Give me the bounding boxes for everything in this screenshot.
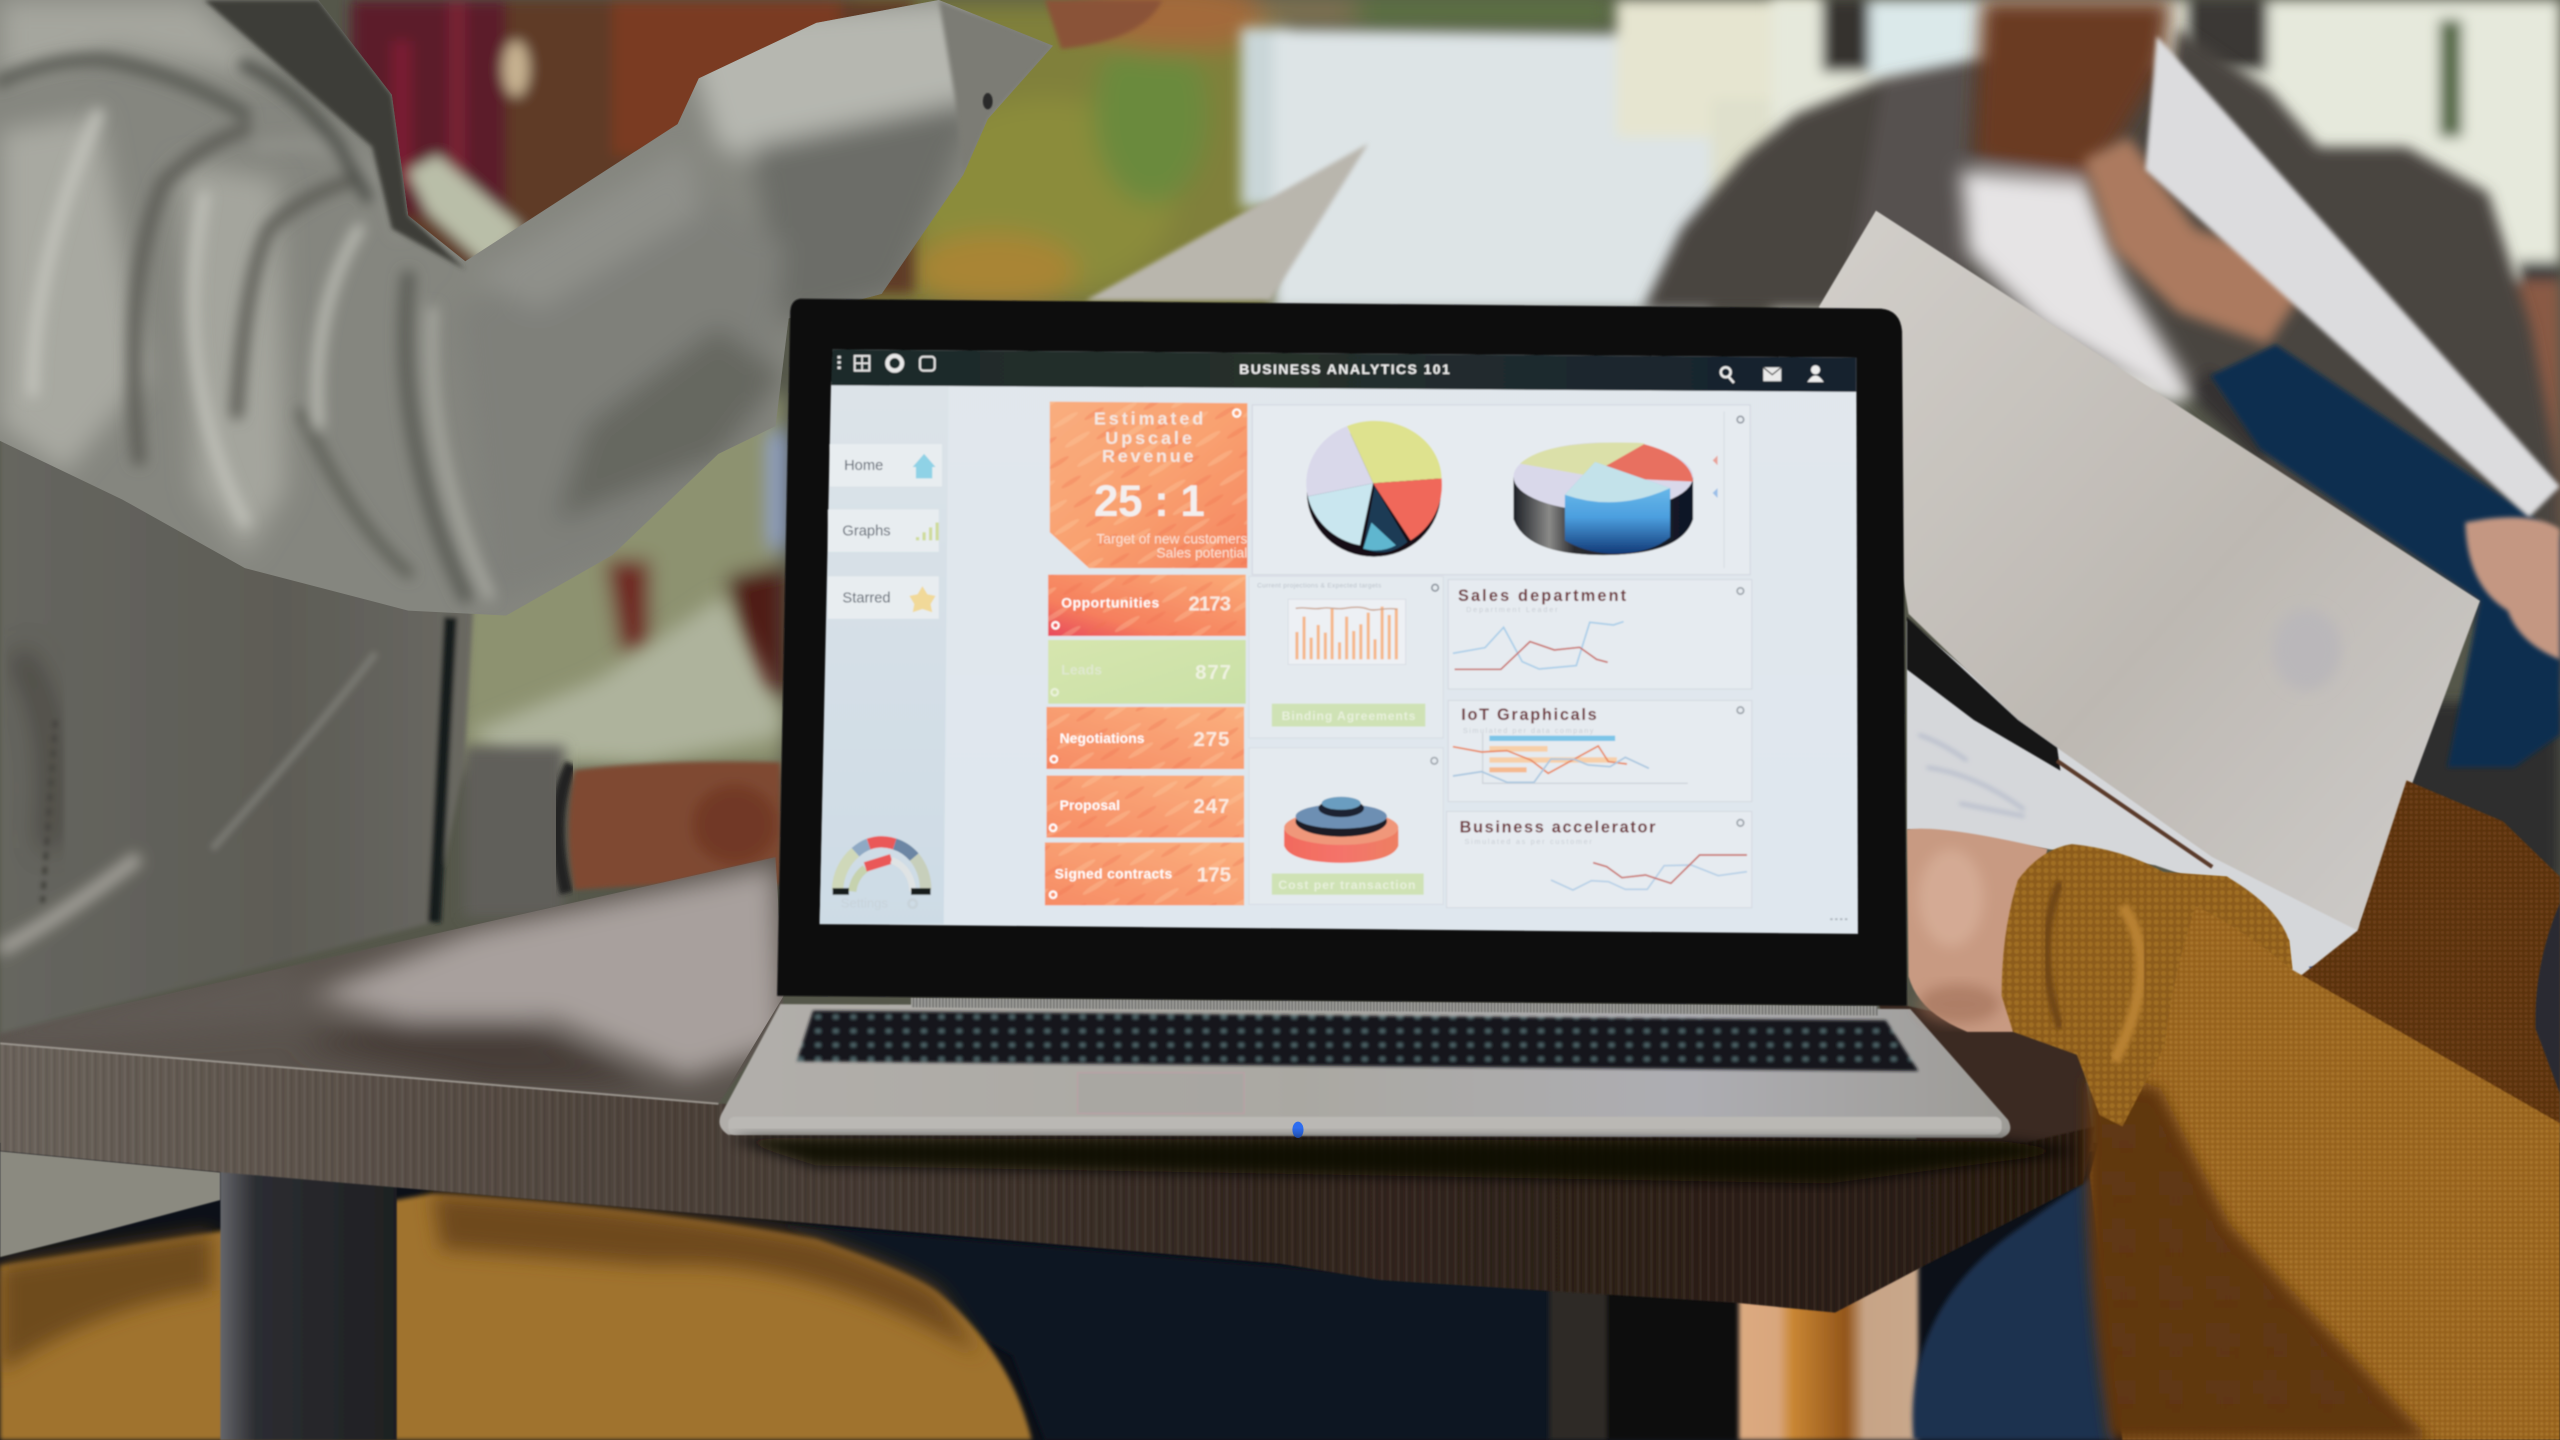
table top surface (0, 857, 784, 1104)
icon on paper (2273, 609, 2341, 691)
card: Negotiations (1047, 707, 1244, 769)
right person: neck and shirt (1961, 0, 2188, 408)
left person: torso (0, 392, 473, 1033)
left person: jacket shoulder and sleeve (0, 0, 1078, 637)
panel: IoT Graphicals: Simulated per data company (1463, 726, 1594, 735)
laptop: hinge grille (911, 998, 1878, 1016)
card: Estimated Upscale Revenue: Target of new customers (1096, 531, 1247, 547)
sweater: main body lit (2090, 873, 2560, 1440)
Binding Agreements button: Binding Agreements (1282, 709, 1416, 723)
flat pie chart (1306, 421, 1442, 557)
background person: grey sleeve and wrist band (464, 746, 571, 918)
orange bars (1295, 607, 1398, 659)
line chart (1551, 855, 1747, 890)
screen corner dots (1830, 918, 1850, 920)
panel: pie charts (1252, 405, 1750, 575)
card: Proposal: Proposal (1060, 797, 1120, 813)
laptop: keyboard (797, 1011, 1918, 1071)
right person: hand on table (1907, 829, 2047, 1032)
cuff (938, 0, 1048, 126)
left jacket hem under table (0, 1151, 220, 1257)
card: Estimated Upscale Revenue: Upscale (1105, 428, 1192, 448)
panel: Business accelerator: Simulated as per customer (1464, 837, 1592, 846)
card: Opportunities (1048, 575, 1246, 636)
background paper behind laptop (1086, 144, 1368, 300)
card: Proposal (1047, 776, 1244, 838)
panel: Sales department: Sales department (1458, 587, 1627, 605)
background: windows on the right (1771, 0, 2560, 882)
panel: IoT Graphicals: IoT Graphicals (1461, 706, 1597, 724)
card: Estimated Upscale Revenue: Sales potential (1156, 545, 1247, 561)
settings label: Settings (841, 896, 888, 911)
top bar left icons (839, 356, 935, 371)
panel: cost per transaction (1249, 748, 1443, 904)
card: Opportunities: Opportunities (1061, 594, 1159, 610)
right hand at edge (2465, 517, 2560, 660)
right person jeans (1912, 1179, 2116, 1440)
card: Estimated Upscale Revenue: Revenue (1102, 446, 1193, 466)
card: Signed contracts: Signed contracts (1055, 865, 1173, 881)
panel: Business accelerator (1447, 811, 1752, 908)
card: Proposal: 247 (1193, 796, 1229, 818)
settings label (841, 896, 917, 911)
3D pie chart (1513, 442, 1693, 555)
sidebar item: Graphs: Graphs (842, 524, 891, 540)
laptop: front edge highlight (728, 1117, 2002, 1135)
sidebar item: Graphs (828, 509, 939, 552)
user icon (1807, 365, 1824, 382)
top bar title: BUSINESS ANALYTICS 101 (1239, 361, 1450, 377)
background: pale whiteboard (1241, 0, 1820, 310)
Cost per transaction button: Cost per transaction (1278, 878, 1416, 892)
card: Signed contracts: 175 (1197, 865, 1231, 887)
trousers: navy jeans under table (784, 1224, 1551, 1440)
search icon (1721, 367, 1734, 383)
background person: pale green sleeve (470, 596, 780, 793)
shadow under laptop (728, 1138, 2082, 1184)
sidebar item: Starred: Starred (842, 590, 891, 606)
gauge (833, 842, 931, 891)
card: Leads: Leads (1061, 661, 1102, 677)
background person: hand on table (569, 762, 780, 890)
sweater: back sleeve (2294, 780, 2560, 1127)
table leg left (220, 1151, 397, 1440)
card: Negotiations: Negotiations (1060, 730, 1145, 746)
card: Signed contracts (1045, 842, 1244, 905)
card: Leads: 877 (1195, 662, 1231, 684)
trousers: mustard chinos (0, 1193, 1032, 1440)
card: Opportunities: 2173 (1189, 594, 1231, 616)
right person: blazer (1642, 28, 2560, 686)
card: Negotiations: 275 (1193, 729, 1229, 751)
panel: Sales department (1448, 580, 1752, 689)
laptop: trackpad (1078, 1073, 1244, 1113)
panel: bar chart with Binding Agreements (1249, 576, 1443, 738)
laptop: blue indicator light (1292, 1122, 1304, 1138)
background person: sage backdrop and strap (457, 392, 787, 767)
card: Estimated Upscale Revenue: Estimated (1094, 408, 1203, 428)
stacked disc icon (1284, 797, 1398, 863)
mail icon (1763, 367, 1781, 381)
right edge dark object (2535, 903, 2560, 1094)
panel: Business accelerator: Business accelerator (1460, 819, 1656, 837)
panel: bar chart with Binding Agreements: Current projections & Expected targets (1257, 583, 1382, 590)
top bar (831, 349, 1856, 392)
big white paper (1819, 211, 2480, 931)
Cost per transaction button (1272, 873, 1424, 895)
laptop: lid and bezel (777, 299, 1907, 1006)
panel: Sales department: Department Leader (1466, 605, 1558, 614)
right person: hand holding paper (2083, 137, 2320, 344)
raised white paper (2145, 36, 2560, 518)
dark binder edge (1907, 617, 2212, 867)
table surface under right hand (1878, 999, 2095, 1176)
laptop screen dashboard (820, 349, 1858, 934)
handwritten papers behind the sweater (1907, 620, 2400, 984)
legend markers (1713, 416, 1744, 498)
sidebar item: Starred (828, 576, 939, 619)
table leg right (1549, 1282, 1739, 1440)
sweater: shaded fold (2087, 1078, 2429, 1440)
bar and line chart (1453, 733, 1688, 783)
background people: maroon hair and skin (351, 0, 914, 294)
card: Estimated Upscale Revenue (1050, 402, 1247, 568)
collar (204, 0, 465, 269)
sidebar item: Home: Home (844, 458, 883, 474)
navy folder (2211, 344, 2560, 767)
screen background (820, 349, 1858, 934)
left person: raised hand (1045, 0, 1162, 49)
sidebar item: Home (829, 444, 942, 487)
line chart (1453, 622, 1624, 669)
table front edge (0, 1043, 2095, 1313)
laptop: silver palm rest (719, 1004, 2010, 1138)
card: Estimated Upscale Revenue: 25 : 1 (1094, 477, 1205, 526)
panel: IoT Graphicals (1448, 700, 1752, 802)
sweater: cuff (2002, 844, 2292, 1127)
Binding Agreements button (1272, 704, 1425, 727)
background: foliage behind (849, 0, 1616, 310)
orange chair leg and floor (1739, 1257, 1918, 1440)
sidebar (820, 382, 949, 924)
card: Leads (1048, 640, 1246, 704)
laptop: base with keyboard (719, 998, 2010, 1138)
sleeve fabric folds (0, 60, 490, 596)
